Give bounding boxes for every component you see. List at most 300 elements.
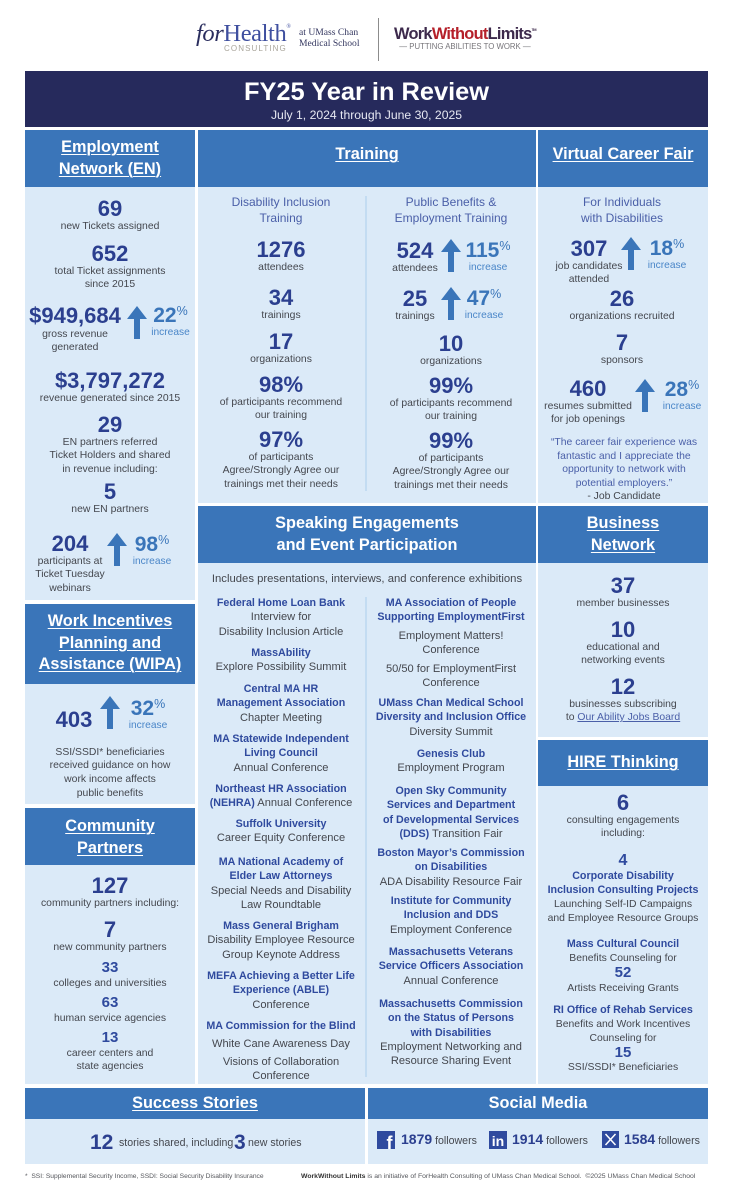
stat: attendees: attendees (258, 262, 304, 272)
stat: new EN partners: 5 (104, 479, 116, 504)
stat: total Tickets: since 2015 (85, 279, 135, 290)
icon: up arrow (635, 379, 655, 412)
entry: Resource Sharing Event (391, 1055, 511, 1067)
text: stories shared: stories shared, including (119, 1137, 233, 1149)
stat: EN partners: Ticket Holders and shared (50, 450, 170, 461)
entry (368, 696, 534, 739)
icon: up arrow (107, 533, 127, 566)
stat: 13 (67, 1029, 153, 1072)
increase 115%: increase (469, 262, 507, 273)
heading (25, 604, 195, 684)
entry: Living Council (244, 747, 318, 759)
stat: job candidates: attended (569, 274, 609, 285)
description (50, 746, 170, 799)
heading: FY25 Year in Review (244, 78, 489, 106)
panel: Speaking Engagements (198, 506, 536, 1084)
stat: recommend: our training (425, 411, 477, 422)
entry: Law Roundtable (241, 899, 321, 911)
subheading: Public Benefits and Employment Training: Public Benefits & (406, 195, 496, 209)
stat: subscribers (538, 676, 708, 724)
panel: HIRE Thinking (538, 740, 708, 1084)
entry: Employment Networking and (380, 1041, 522, 1053)
heading (198, 506, 536, 563)
column divider (365, 597, 367, 1077)
entry: Diversity and Inclusion Office (376, 711, 526, 723)
stat: RI Office of Rehab Services: SSI/SSDI* Beneficiaries (568, 1062, 678, 1073)
stat: sponsors (538, 332, 706, 366)
stat: organizations recruited: 26 (610, 286, 634, 311)
stat: organizations (250, 329, 312, 364)
stat: 7: new community partners (53, 942, 167, 952)
stat: organizations: 17 (269, 329, 293, 354)
stat: gross revenue: generated (52, 342, 98, 353)
increase 28%: increase (663, 401, 701, 412)
entry: Northeast HR Association (215, 783, 347, 795)
stat: trainings: 25 (403, 286, 427, 311)
stat: subscribers: 12 (611, 674, 635, 699)
stat: gross revenue (29, 303, 121, 353)
icon: up arrow (441, 239, 461, 272)
stat: sponsors: 7 (616, 330, 628, 355)
heading: Work Incentives (48, 612, 172, 630)
stat: events (538, 619, 708, 667)
stat: attendees: 524 (397, 238, 433, 263)
entry: Massachusetts Veterans (389, 946, 513, 958)
heading: Community (65, 817, 155, 835)
increase 47%: 47% (467, 287, 501, 310)
stat: EN partners: 29 (98, 412, 122, 437)
column divider (365, 196, 367, 491)
panel: Business Network (538, 506, 708, 737)
stat: consulting engagements: 6 (617, 790, 629, 815)
entry: UMass Chan Medical School (379, 697, 523, 709)
stat: 13: career centers and (67, 1048, 153, 1058)
stat: EN partners (50, 412, 170, 475)
LinkedIn followers (489, 1131, 593, 1149)
quote (538, 436, 710, 504)
stat: agree: Agree/Strongly Agree our (223, 465, 339, 476)
entry: Service Officers Association (379, 960, 523, 972)
entry: Employment Program (397, 762, 505, 774)
stat: new Tickets (61, 196, 159, 232)
entry: (DDS) Transition Fair (399, 828, 503, 840)
stat: resumes (538, 378, 638, 426)
icon: up arrow (621, 237, 641, 270)
entry (198, 855, 364, 912)
icon: up arrow (100, 696, 120, 729)
stat: resumes: resumes submitted (544, 400, 632, 412)
quote: opportunity to network with (562, 464, 686, 475)
description: received guidance on how (50, 760, 170, 771)
entry: Conference (252, 1070, 310, 1082)
stat: 127: 127 (92, 873, 128, 898)
heading: Planning and (59, 634, 161, 652)
stat: organizations: 10 (439, 331, 463, 356)
stat: job candidates: job candidates (555, 260, 622, 272)
stat: Mass Cultural Council (538, 936, 708, 994)
increase 115% (465, 239, 510, 273)
stat: RI Office of Rehab Services: Counseling for (589, 1033, 656, 1044)
entry: Conference (422, 677, 480, 689)
Facebook followers (377, 1131, 481, 1149)
entry: Visions of Collaboration (223, 1056, 339, 1068)
entry: Institute for Community (391, 895, 511, 907)
footnote: * SSI: Supplemental Security Income, SSDI: Social Security Disability Insurance (25, 1173, 264, 1180)
entry: of Developmental Services (383, 814, 519, 826)
icon: up arrow (441, 287, 461, 320)
stat: organizations recruited: organizations recruited (569, 310, 675, 322)
X followers (602, 1131, 706, 1149)
subheading: For Individuals (583, 195, 661, 209)
entry: on Disabilities (415, 861, 487, 873)
quote: fantastic and I appreciate the (557, 450, 691, 462)
heading: Virtual Career Fair (553, 145, 693, 163)
entry: Disability Inclusion Article (219, 626, 343, 638)
heading: Success Stories (132, 1094, 258, 1112)
stat: total Tickets (54, 241, 166, 290)
entry: Inclusion and DDS (404, 909, 498, 921)
stat: Mass Cultural Council: Benefits Counseling for (569, 953, 677, 964)
logo: forHealth Consulting at UMass Chan Medical School (196, 20, 360, 53)
stat: member businesses: 37 (611, 573, 635, 598)
stat: revenue since 2015: $3,797,272 (55, 368, 165, 393)
stat: attendees: attendees (392, 262, 438, 274)
stat: attendees: 1276 (257, 237, 305, 262)
entry (198, 682, 364, 725)
stat: organizations: organizations (420, 356, 482, 366)
entry (368, 846, 534, 889)
stat: subscribers: businesses subscribing (569, 698, 677, 710)
stat: resumes: 460 (570, 376, 606, 401)
increase 98%: increase (133, 556, 171, 567)
entry: MassAbility (251, 647, 311, 659)
stat: organizations (420, 331, 482, 366)
stat: gross revenue: $949,684 (29, 303, 121, 328)
stat: 33 (53, 959, 167, 988)
increase 47% (465, 287, 503, 321)
logo: forHealth Consulting at UMass Chan Medical School: CONSULTING (224, 44, 287, 53)
stat: 403: 403 (56, 707, 92, 732)
panel: Employment Network (25, 130, 195, 600)
entry (368, 747, 534, 776)
stat: total Tickets: 652 (92, 241, 128, 266)
stat: agree: of participants (419, 452, 483, 464)
stat: 33: colleges and universities (53, 978, 167, 988)
stat: organizations: organizations (250, 354, 312, 364)
entry: Mass General Brigham (223, 920, 339, 932)
stat: agree (222, 427, 340, 490)
heading: Business (587, 514, 659, 532)
heading: Employment (61, 138, 159, 156)
increase 22% (151, 304, 190, 338)
logo: forHealth Consulting at UMass Chan Medical School: at UMass Chan (299, 27, 358, 38)
heading (198, 130, 536, 187)
increase 98% (133, 533, 171, 567)
entry (198, 782, 364, 811)
heading: Partners (77, 838, 143, 856)
stat: webinar participants (35, 531, 105, 594)
logo: forHealth Consulting at UMass Chan Medical School: forHealth® (196, 20, 290, 47)
stat: agree (392, 428, 510, 491)
stat: trainings (261, 285, 301, 320)
increase 28% (657, 379, 707, 413)
entry (198, 969, 364, 1012)
subheading: Disability Inclusion Training (232, 195, 330, 225)
stat: corporate projects: and Employee Resource Groups (548, 913, 698, 924)
panel: Community Partners (25, 808, 195, 1084)
entry: Chapter Meeting (240, 712, 322, 724)
entry: Annual Conference (404, 975, 498, 987)
stat: agree: of participants (249, 452, 313, 462)
stat: subscribers: to Our Ability Jobs Board (566, 712, 680, 723)
entry: MEFA Achieving a Better Life (207, 970, 355, 982)
stat: resumes: for job openings (551, 414, 625, 425)
entry: Career Equity Conference (217, 832, 345, 844)
increase 32%: 32% (131, 697, 165, 720)
stat: agree: Agree/Strongly Agree our (393, 466, 509, 477)
entry: Supporting EmploymentFirst (377, 611, 525, 623)
increase 18%: increase (648, 260, 686, 271)
entry: Employment Conference (390, 924, 512, 936)
stat: recommend: of participants recommend (390, 398, 512, 408)
heading: Network (591, 536, 655, 554)
stat: organizations recruited (538, 288, 706, 322)
heading (25, 1088, 365, 1119)
logo: Work Without Limits: WorkWithoutLimitsTM (394, 25, 536, 43)
entry: Boston Mayor’s Commission (377, 847, 525, 859)
entry (368, 894, 534, 937)
credit line: WorkWithout Limits is an initiative of ForHealth Consulting of UMass Chan Medical School. ©2025 UMass Chan Medical School (301, 1173, 695, 1180)
stat: corporate projects: 4 (619, 852, 627, 869)
entry: 50/50 for EmploymentFirst (386, 663, 516, 675)
heading (538, 506, 708, 563)
entry (368, 997, 534, 1069)
entry: Massachusetts Commission (379, 998, 523, 1010)
stat: recommend (390, 373, 512, 422)
stat: trainings: trainings (395, 310, 435, 322)
entry: Annual Conference (234, 762, 328, 774)
stat: RI Office of Rehab Services: RI Office of Rehab Services (553, 1004, 693, 1016)
entry: Conference (252, 999, 310, 1011)
number: 3 new: 3 (234, 1131, 246, 1154)
entry: White Cane Awareness Day (212, 1038, 350, 1050)
stat: job candidates (555, 236, 622, 285)
stat: webinar participants: Ticket Tuesday (35, 569, 105, 580)
entry: MA Commission for the Blind (206, 1020, 356, 1032)
stat: revenue since 2015 (40, 368, 180, 404)
entry: Management Association (217, 697, 345, 709)
stat: new Tickets: new Tickets assigned (61, 220, 159, 232)
heading (25, 130, 195, 187)
increase 22%: increase (151, 327, 190, 338)
stat: 63: 63 (102, 994, 118, 1011)
entry: Federal Home Loan Bank (217, 597, 345, 609)
stat: agree: 99% (429, 428, 473, 453)
count: 1584 followers (624, 1131, 700, 1147)
icon: LinkedIn (489, 1131, 507, 1149)
subheading (581, 195, 663, 225)
panel: WIPA (25, 604, 195, 804)
stat: 127 (41, 873, 179, 908)
panel: Success Stories (25, 1088, 365, 1164)
entry: Diversity Summit (409, 726, 493, 738)
subheading: with Disabilities (581, 211, 663, 225)
entry: Employment Matters! (399, 630, 503, 642)
stat: 33: 33 (102, 959, 118, 976)
entry: Services and Department (387, 799, 515, 811)
stat: recommend: of participants recommend (220, 396, 342, 408)
entry: Suffolk University (236, 818, 326, 830)
stat: Mass Cultural Council: Mass Cultural Council (567, 938, 679, 950)
heading: Speaking Engagements (275, 514, 459, 532)
icon: up arrow (127, 306, 147, 339)
panel: Training (198, 130, 536, 503)
entry: MA National Academy of (219, 856, 343, 868)
stat: agree: trainings met their needs (224, 479, 338, 490)
stat: webinar participants: webinars (49, 583, 91, 594)
stat: recommend: 99% (429, 373, 473, 398)
entry: Interview for (251, 611, 311, 623)
entry (198, 1055, 364, 1084)
heading (368, 1088, 708, 1119)
increase 98%: 98% (135, 533, 169, 556)
stat: 63 (54, 994, 166, 1024)
entry: (NEHRA) Annual Conference (210, 797, 352, 809)
stat: attendees (392, 238, 438, 274)
heading (25, 808, 195, 865)
icon: Facebook (377, 1131, 395, 1149)
entry: Elder Law Attorneys (230, 870, 332, 882)
entry (198, 817, 364, 846)
stat: EN partners: in revenue including: (62, 464, 158, 475)
entry (198, 646, 364, 675)
stat: events: educational and (586, 642, 660, 652)
increase 32%: increase (129, 720, 167, 731)
subheading: Disability Inclusion Training: Disability Inclusion (232, 195, 330, 209)
intro text: Includes presentations, interviews, and conference exhibitions (212, 573, 522, 585)
quote: “The career fair experience was (551, 437, 697, 448)
stat: total Tickets: total Ticket assignments (55, 266, 165, 276)
stat: sponsors: sponsors (601, 354, 643, 366)
entry: Open Sky Community (395, 785, 507, 797)
increase 32% (129, 697, 167, 731)
entry (198, 732, 364, 775)
entry: Conference (422, 644, 480, 656)
increase 47%: increase (465, 310, 503, 321)
stat: trainings: 34 (269, 285, 293, 310)
stat: 127: community partners including: (41, 898, 179, 908)
icon: LinkedIn: in (492, 1133, 504, 1149)
stat: gross revenue: gross revenue (42, 328, 108, 340)
stories stat (90, 1130, 302, 1156)
stat: recommend (220, 372, 342, 421)
count: 1914 followers (512, 1131, 588, 1147)
logo divider (378, 18, 379, 61)
heading: Social Media (489, 1094, 587, 1112)
stat: new EN partners (71, 479, 149, 514)
description: public benefits (77, 788, 143, 799)
entry: MA Association of People (386, 597, 516, 609)
title banner (25, 71, 708, 127)
entry: Central MA HR (244, 683, 318, 695)
stat: events: networking events (581, 655, 665, 666)
stat: trainings: trainings (261, 310, 301, 320)
entry (368, 945, 534, 988)
heading (538, 740, 708, 786)
stat: recommend: our training (255, 410, 307, 421)
subheading: Public Benefits and Employment Training: Employment Training (395, 211, 507, 225)
stat: RI Office of Rehab Services: Benefits and Work Incentives (556, 1019, 690, 1030)
entry: Explore Possibility Summit (216, 661, 346, 673)
heading: Network (EN) (59, 160, 161, 178)
quote: potential employers.” (576, 478, 672, 488)
increase 18% (642, 238, 692, 272)
heading: Assistance (WIPA) (39, 655, 181, 673)
heading: Training (335, 145, 399, 163)
stat: new EN partners: new EN partners (71, 504, 149, 514)
stat: member businesses: member businesses (576, 598, 669, 608)
description: work income affects (64, 774, 156, 785)
stat: Mass Cultural Council: 52 (615, 964, 631, 981)
entry: Group Keynote Address (222, 949, 340, 961)
stat: 63: human service agencies (54, 1012, 166, 1024)
stat: new Tickets: 69 (98, 196, 122, 221)
description: SSI/SSDI* beneficiaries (55, 746, 165, 758)
entry: Special Needs and Disability (211, 885, 351, 897)
stat: corporate projects: Inclusion Consulting Projects (548, 884, 698, 896)
entry (368, 596, 534, 625)
increase 115%: 115% (465, 239, 510, 262)
increase 18%: 18% (650, 237, 684, 260)
stat: 13: 13 (102, 1029, 118, 1046)
increase 28%: 28% (665, 378, 699, 401)
heading (538, 130, 708, 187)
logo: Work Without Limits: — PUTTING ABILITIES TO WORK — (399, 42, 531, 51)
quote: - Job Candidate (587, 491, 661, 502)
stat: consulting engagements (538, 792, 708, 840)
entry: ADA Disability Resource Fair (380, 876, 522, 888)
subheading: Disability Inclusion Training: Training (260, 211, 302, 225)
stat: agree: 97% (259, 427, 303, 452)
date range: July 1, 2024 through June 30, 2025 (271, 108, 462, 122)
heading: and Event Participation (277, 536, 457, 554)
increase 22%: 22% (153, 304, 188, 327)
entry (368, 784, 534, 841)
entry: Disability Employee Resource (207, 934, 355, 946)
stat: EN partners: EN partners referred (63, 436, 157, 448)
stat: 7: 7 (104, 917, 116, 942)
stat: webinar participants: 204 (52, 531, 88, 556)
stat: member businesses (538, 575, 708, 609)
count: 1879 followers (401, 1131, 477, 1147)
stat: RI Office of Rehab Services (538, 1002, 708, 1074)
text: new stories: new stories (248, 1137, 302, 1149)
stat: revenue since 2015: revenue generated since 2015 (40, 392, 180, 404)
stat: trainings (395, 286, 435, 322)
entry (368, 629, 534, 658)
logo: Work Without Limits (394, 25, 536, 51)
stat: consulting engagements: consulting engagements (567, 814, 679, 826)
stat: events: 10 (611, 617, 635, 642)
stat: Mass Cultural Council: Artists Receiving Grants (567, 983, 679, 994)
entry (368, 662, 534, 691)
entry: Experience (ABLE) (233, 984, 329, 996)
panel: Virtual Career Fair (538, 130, 708, 503)
entry: MA Statewide Independent (213, 733, 349, 745)
stat: corporate projects (538, 852, 708, 925)
logo: forHealth Consulting at UMass Chan Medical School: Medical School (299, 38, 359, 48)
stat: job candidates: 307 (571, 236, 607, 261)
